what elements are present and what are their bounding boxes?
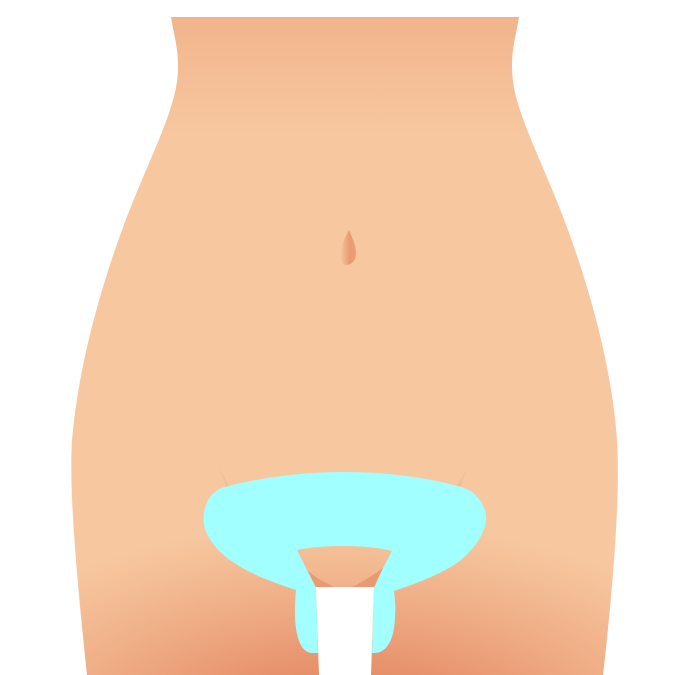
white strip: [316, 587, 374, 675]
icon: navel: [340, 230, 356, 265]
highlighted region: [203, 472, 486, 653]
torso: [71, 17, 618, 675]
left hip crease: [217, 462, 229, 488]
right hip crease: [457, 461, 469, 487]
inner shadow: [308, 568, 383, 587]
